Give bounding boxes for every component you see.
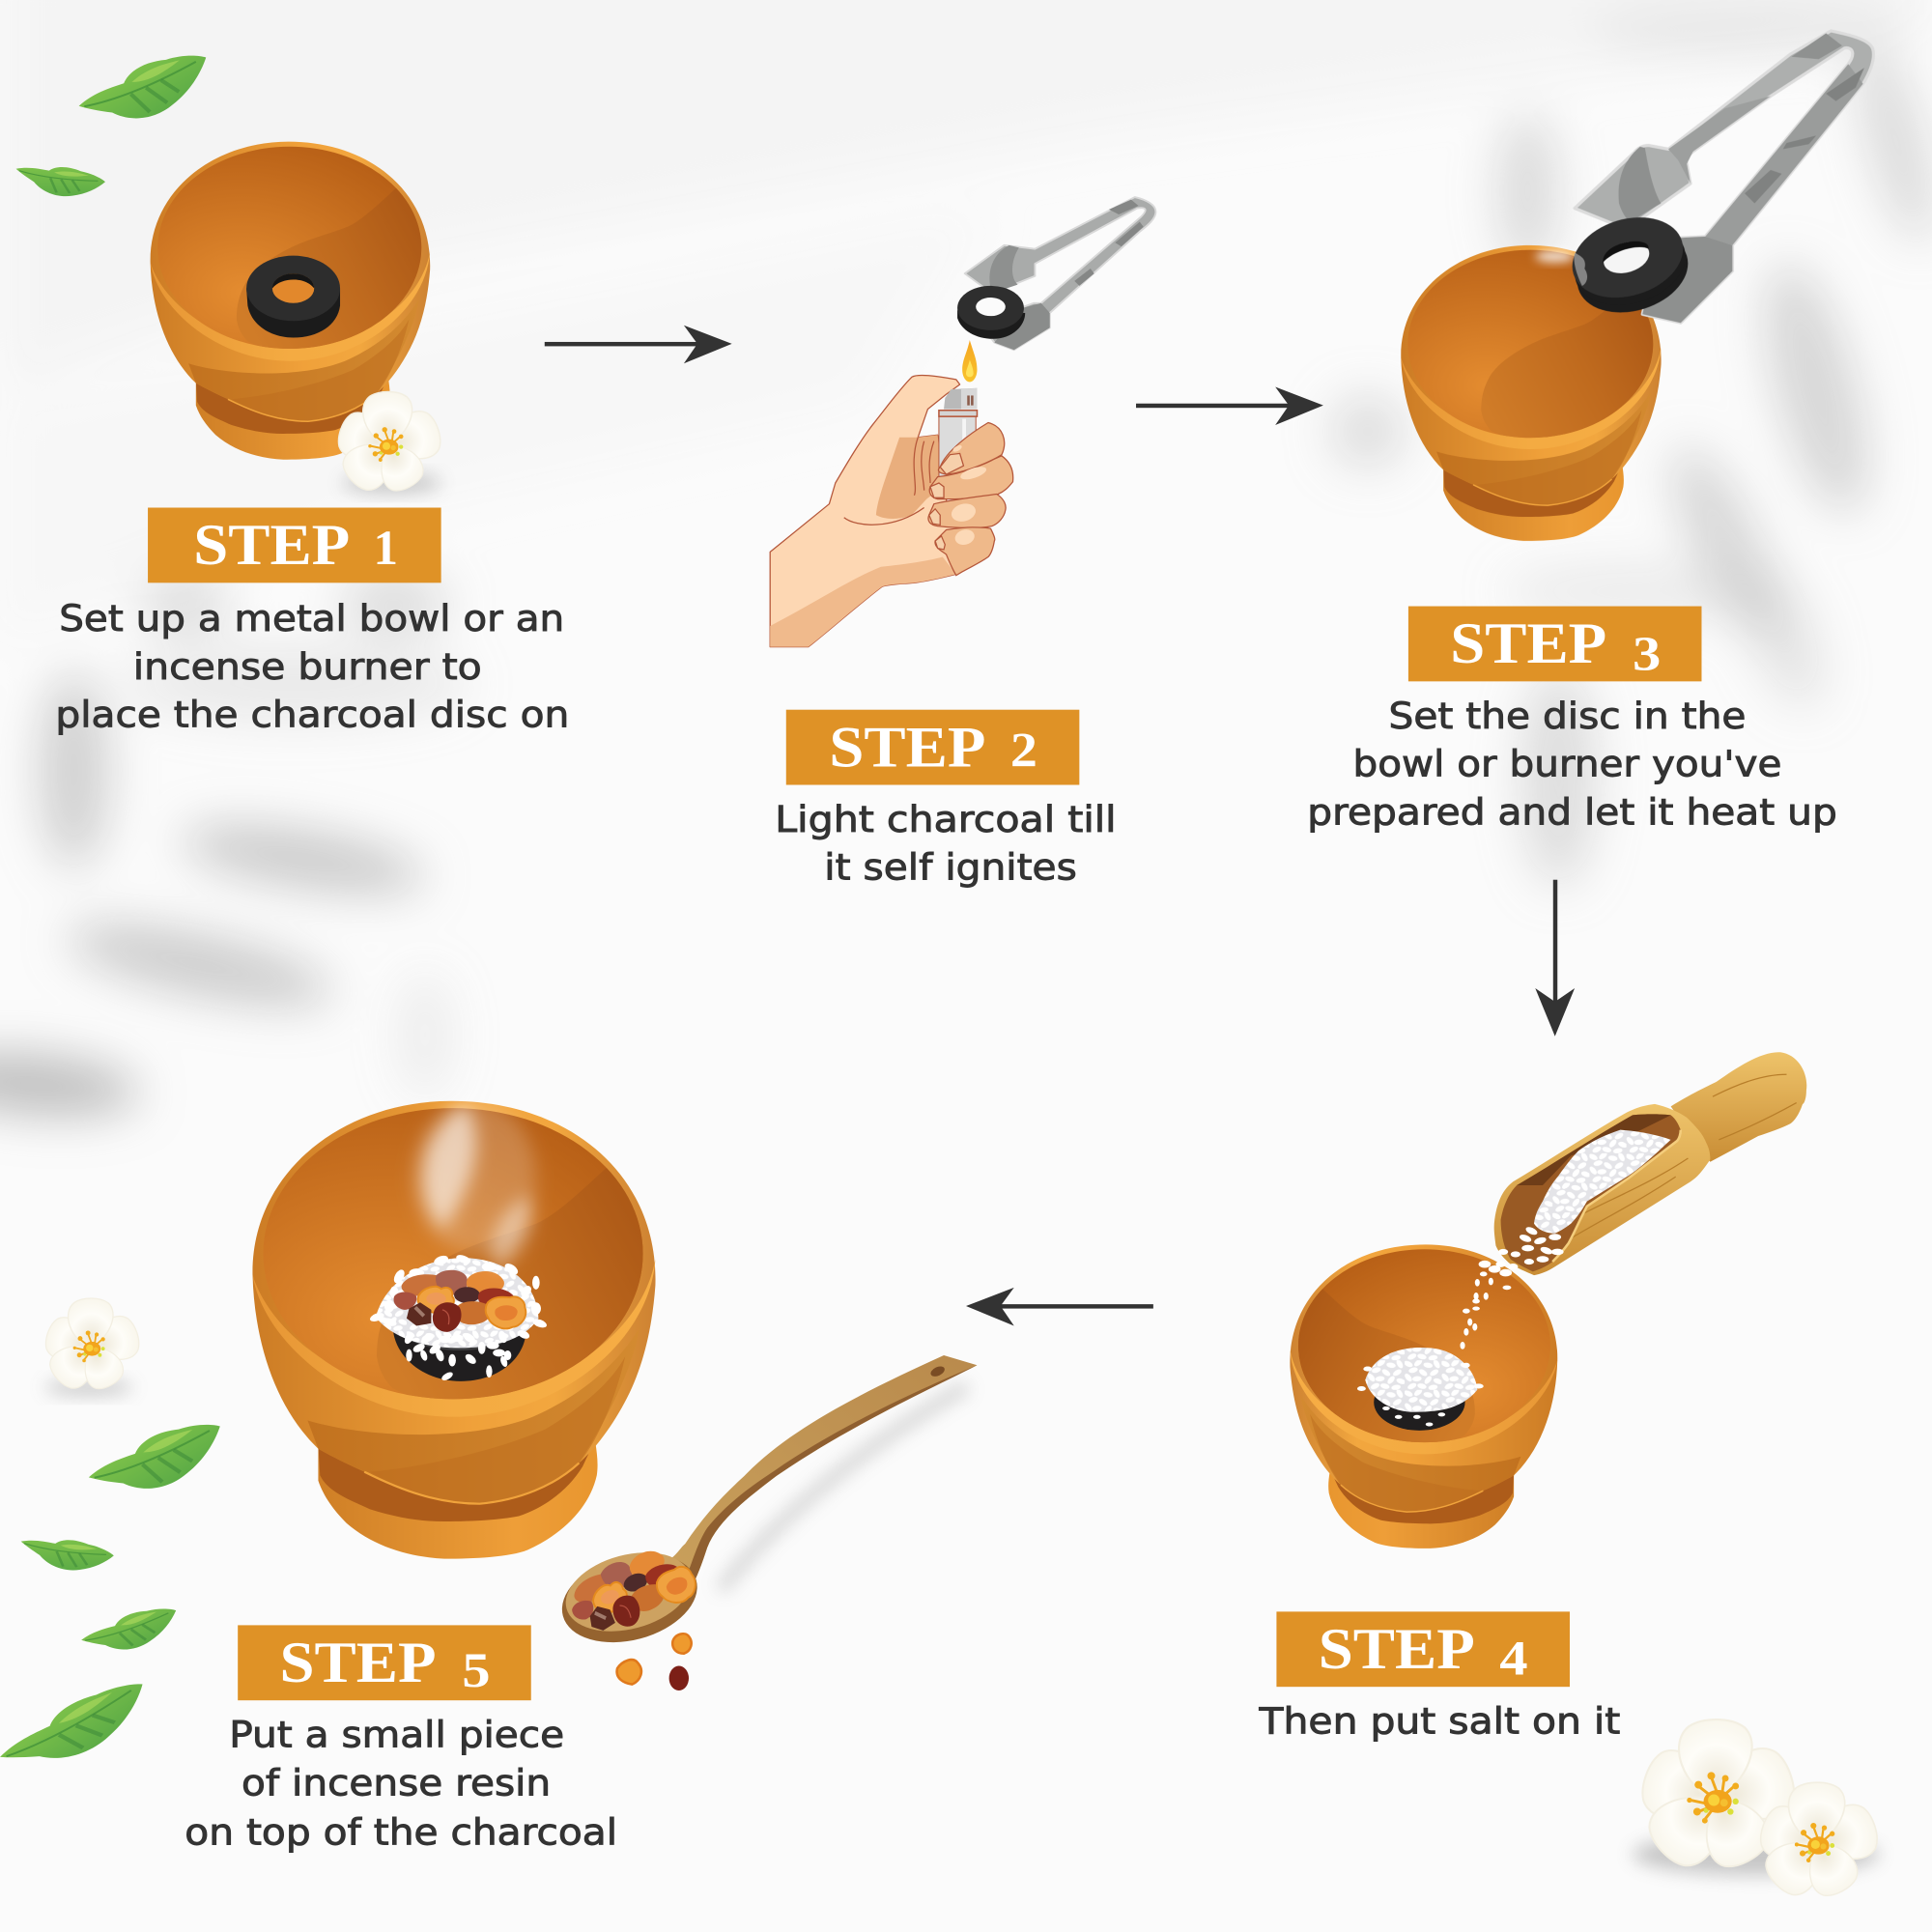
step 3 text: bowl or burner you've [1353, 744, 1781, 785]
step 1 text [55, 598, 569, 736]
flame [962, 340, 977, 382]
step 1 text: Set up a metal bowl or an [59, 598, 564, 639]
step 4 label [1276, 1611, 1570, 1687]
flowers bottom right [1633, 1719, 1884, 1903]
arrow 2 [1136, 387, 1323, 425]
step 2 text: it self ignites [824, 847, 1077, 889]
step 2 label [786, 710, 1079, 784]
step 5 text: of incense resin [242, 1762, 551, 1804]
hand [770, 375, 994, 647]
falling salt [1460, 1261, 1518, 1350]
step 3 label: STEP [1450, 611, 1606, 675]
leaf left 2 [16, 1522, 115, 1583]
step 4 label: STEP [1319, 1617, 1475, 1681]
step 4 illustration [1275, 1052, 1806, 1548]
bowl [151, 142, 446, 460]
step 1 illustration: bowl with charcoal disc [151, 142, 446, 460]
leaf left 4 [0, 1680, 156, 1776]
bowl [1275, 1244, 1557, 1548]
leaf left 3 [79, 1607, 180, 1654]
spoon with resin [553, 1355, 977, 1657]
step 3 text: Set the disc in the [1389, 696, 1746, 737]
step 2 text: Light charcoal till [775, 799, 1117, 840]
step 5 label [238, 1625, 531, 1700]
step 5 illustration [252, 1100, 678, 1559]
charcoal disc [246, 256, 340, 337]
leaf top 1 [73, 52, 213, 128]
steam [1535, 250, 1575, 263]
arrow 3 [1535, 880, 1575, 1037]
disc [1562, 205, 1698, 326]
step 3 text [1307, 696, 1837, 833]
step 1 label [148, 508, 441, 582]
step 2 text [775, 799, 1117, 889]
scoop [1494, 1052, 1806, 1275]
salt ring [369, 1253, 548, 1382]
tongs small [965, 197, 1155, 350]
step 4 text: Then put salt on it [1258, 1701, 1620, 1743]
disc small [957, 286, 1025, 339]
step 3 illustration [1401, 31, 1873, 541]
step 5 label: STEP [280, 1631, 437, 1694]
tongs [1575, 31, 1873, 323]
leaf left 1 [83, 1421, 228, 1498]
step 3 label: 3 [1633, 628, 1661, 682]
flower left [42, 1297, 144, 1396]
step 4 label: 4 [1499, 1632, 1528, 1686]
step 5 label: 5 [462, 1644, 491, 1698]
disc with salt [1357, 1348, 1484, 1431]
step 1 label: STEP [193, 513, 350, 577]
step 1 label: 1 [373, 522, 398, 576]
arrow 1 [545, 326, 732, 363]
bowl [252, 1101, 678, 1559]
charcoal [393, 1292, 526, 1381]
step 3 label [1408, 607, 1701, 682]
flower: step 1 [333, 391, 446, 497]
step 2 label: 2 [1010, 724, 1037, 778]
resin on charcoal [393, 1270, 526, 1332]
step 5 text [185, 1715, 617, 1853]
step 5 text: Put a small piece [229, 1715, 564, 1756]
fingers [928, 423, 1013, 576]
step 2 illustration: tongs, disc, lighter and hand [770, 197, 1155, 647]
step 3 text: prepared and let it heat up [1307, 791, 1837, 833]
fallen resin pieces [617, 1634, 692, 1690]
arrow 4 [966, 1288, 1153, 1325]
bowl [1401, 245, 1676, 541]
step 5 text: on top of the charcoal [185, 1811, 617, 1853]
steam [412, 1100, 536, 1269]
lighter [939, 388, 977, 478]
step 1 text: place the charcoal disc on [55, 695, 569, 736]
leaf top 2 [12, 151, 106, 209]
step 2 label: STEP [829, 715, 985, 779]
step 1 text: incense burner to [133, 646, 482, 688]
